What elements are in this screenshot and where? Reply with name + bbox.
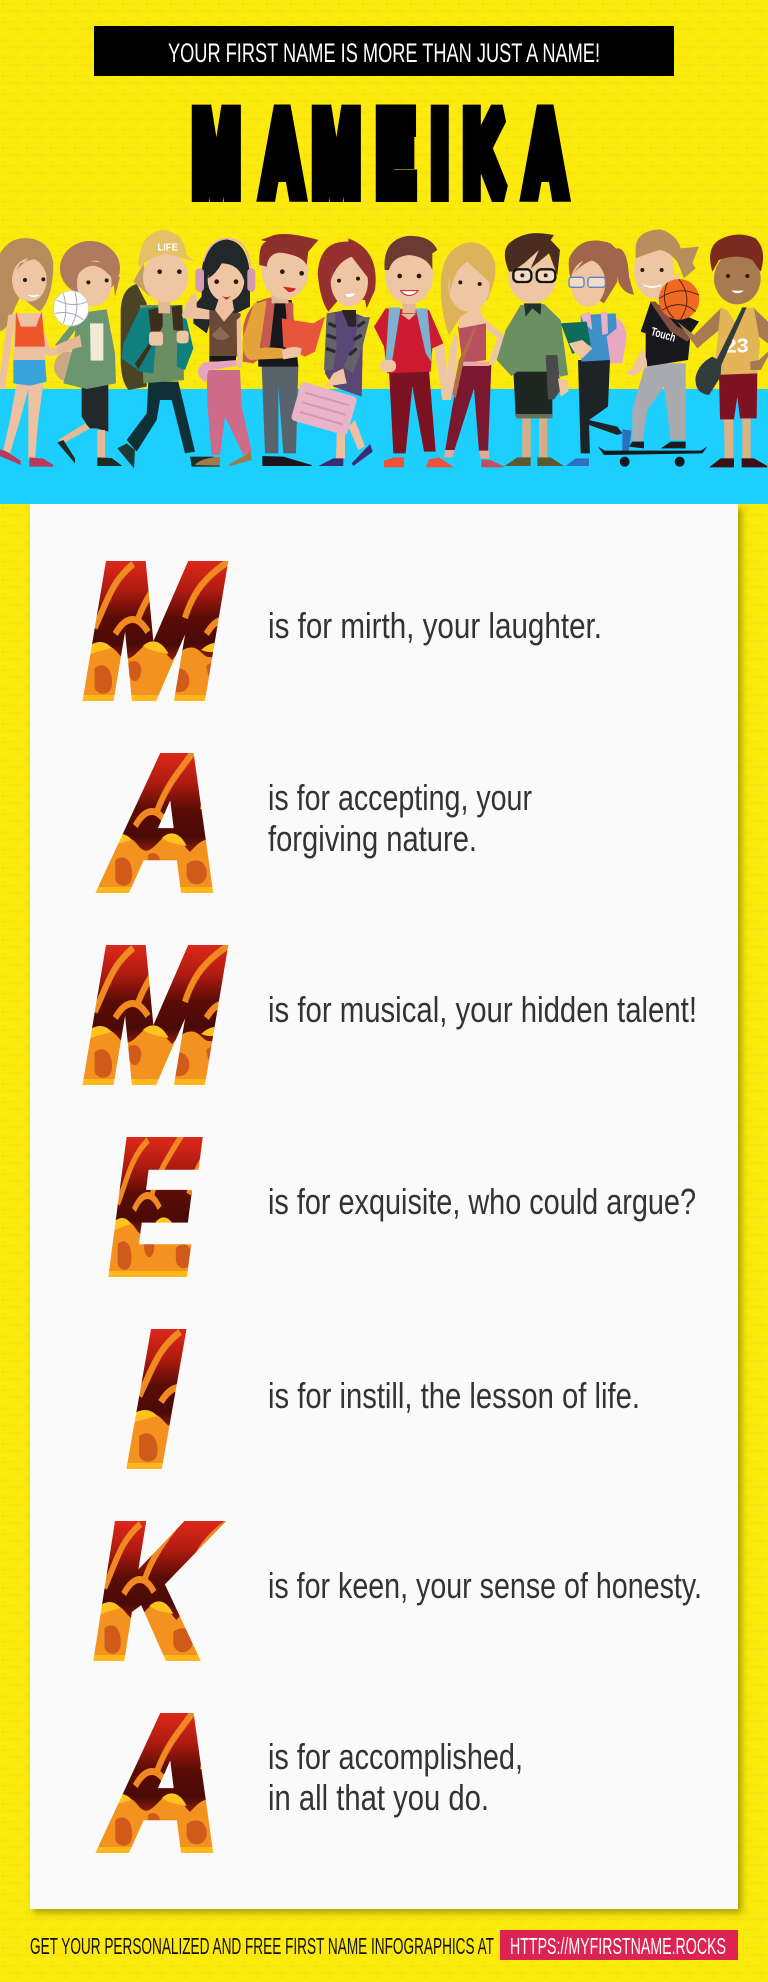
- lines: accepting: forgiving nature.: [268, 818, 477, 859]
- person: boy with tank top and bag: [677, 235, 768, 467]
- row: letter M, musical: [86, 911, 697, 1119]
- floor band: [0, 389, 768, 504]
- lines: accomplished: is for accomplished,: [268, 1736, 523, 1777]
- person: girl with headphones: [182, 239, 255, 466]
- row: letter E, exquisite: [111, 1102, 696, 1311]
- row: letter K, keen: [96, 1487, 702, 1695]
- lines: accomplished: [268, 1736, 523, 1818]
- right half of the group: [374, 229, 768, 467]
- flame letter E: E: [111, 1102, 198, 1311]
- flame letter A: A: [103, 1679, 218, 1887]
- flame letter A: A: [103, 719, 218, 927]
- person: boy in red tee: [374, 236, 454, 467]
- row: letter I, instill: [130, 1295, 640, 1503]
- line: mirth: is for mirth, your laughter.: [268, 605, 602, 646]
- line: instill: is for instill, the lesson of life.: [268, 1375, 640, 1416]
- person: boy with book: [242, 234, 325, 466]
- person: girl with pink bag: [291, 238, 376, 466]
- lines: accomplished: in all that you do.: [268, 1777, 489, 1818]
- row: letter A, accomplished: [103, 1679, 523, 1887]
- person: girl with volleyball: [53, 241, 122, 466]
- panel: white card: [30, 504, 738, 1909]
- card shadow: [34, 508, 742, 1913]
- person: hiker with cap and backpack: [117, 230, 220, 468]
- flame letter I: I: [130, 1295, 180, 1503]
- person: skater with basketball: Touch: [649, 324, 677, 345]
- lines: accepting: [268, 777, 532, 859]
- illustration: group of students: [0, 229, 768, 468]
- left half of the group: [0, 230, 376, 468]
- person: hiker with cap and backpack: LIFE: [157, 243, 178, 254]
- row: letter A, accepting: [103, 719, 532, 927]
- lines: accepting: is for accepting, your: [268, 777, 532, 818]
- flame letter M: M: [86, 527, 222, 735]
- person: boy with tank top and bag: 23: [725, 334, 749, 357]
- row: letter M, mirth: [86, 527, 602, 735]
- person: skater with basketball: [598, 229, 707, 467]
- top banner: [94, 26, 674, 76]
- name title: MAMEIKA: [193, 91, 565, 216]
- person: girl with ponytail and tablet: [561, 240, 634, 466]
- person: girl in orange top: [0, 238, 82, 467]
- person: boy with glasses: [497, 233, 568, 466]
- person: blonde girl: [441, 242, 506, 467]
- flame letter M: M: [86, 911, 222, 1119]
- flame letter K: K: [96, 1487, 213, 1695]
